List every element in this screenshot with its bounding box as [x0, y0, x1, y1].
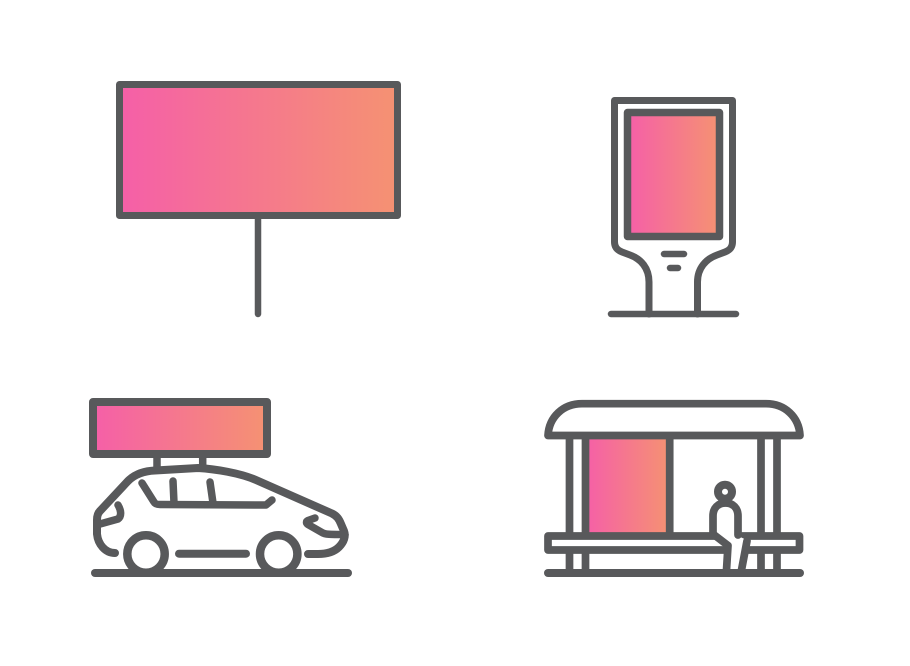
icon: car with roof-mounted screen	[93, 402, 348, 573]
icon: bus shelter with ad panel and seated person	[548, 404, 800, 573]
icon: digital kiosk totem	[611, 100, 736, 314]
icon: roadside billboard	[120, 84, 398, 314]
